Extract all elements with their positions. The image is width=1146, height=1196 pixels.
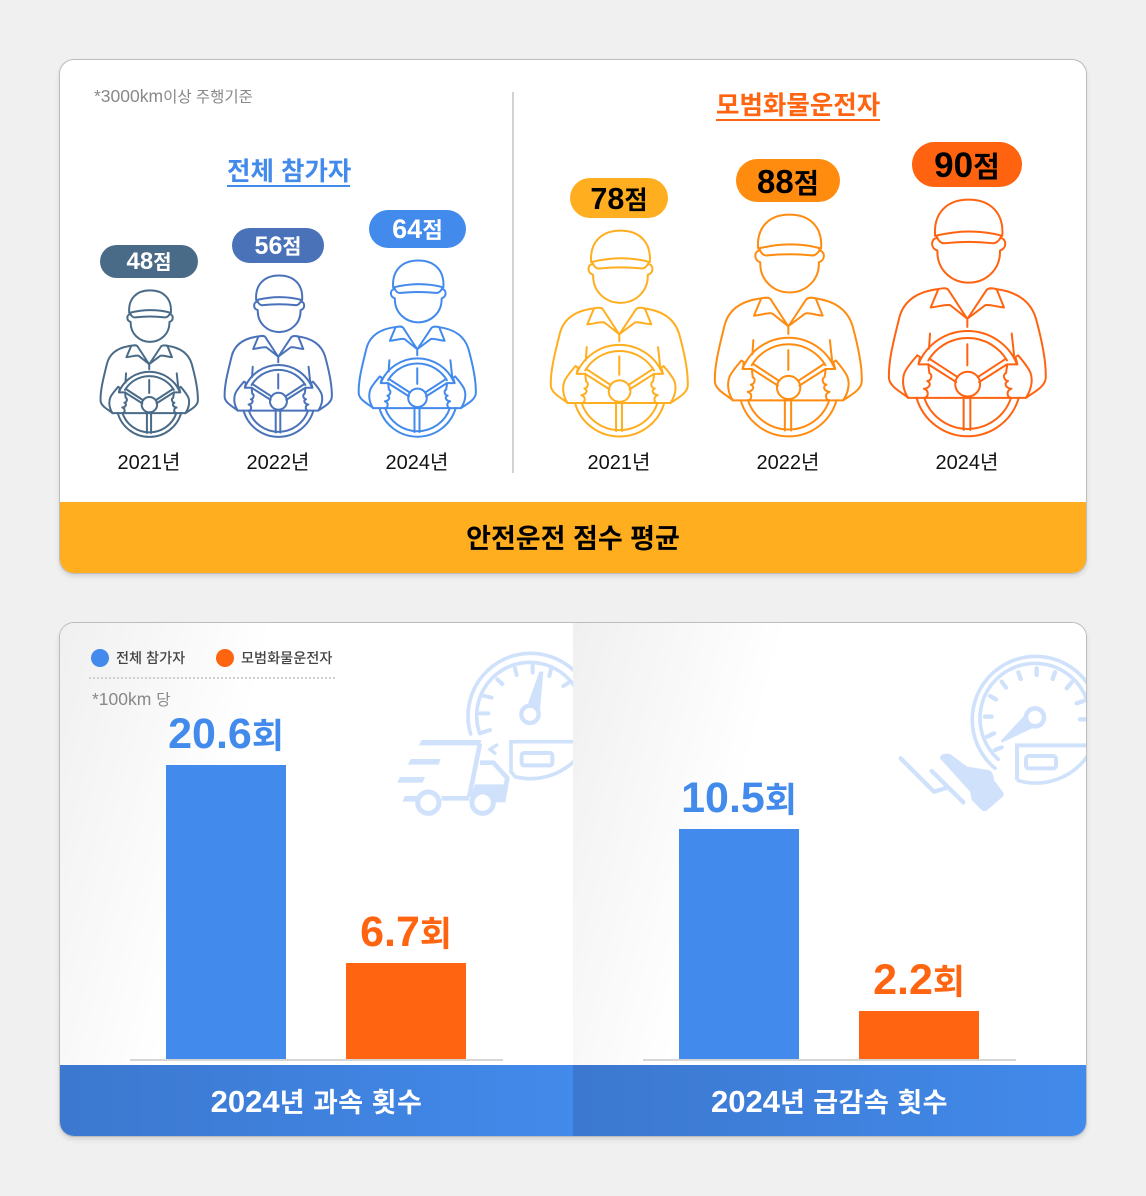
- score pill: 48: 48점: [126, 248, 172, 275]
- bar: acceleration all: [679, 829, 799, 1059]
- note: driving distance basis: *3000km이상 주행기준: [94, 86, 253, 106]
- year label: 2024년: [936, 452, 998, 474]
- score pill: 88: 88점: [757, 163, 819, 200]
- footer bar: speeding: [60, 1065, 573, 1136]
- score pill: 56: 56점: [255, 232, 301, 260]
- icon: driver 2021 all: [100, 289, 199, 438]
- icon: driver 2022 model: [714, 214, 863, 438]
- score pill: 48: [100, 245, 198, 278]
- legend: [89, 648, 335, 679]
- icon: speeding truck and gauge: [398, 652, 573, 816]
- legend dot: all participants: [91, 649, 109, 667]
- icon: driver 2024 all: [358, 260, 477, 438]
- footer title: hard acceleration count: 2024년 급감속 횟수: [711, 1084, 948, 1119]
- footer title: safe driving score: 안전운전 점수 평균: [466, 524, 680, 554]
- score pill: 64: 64점: [392, 214, 443, 244]
- year label: 2022년: [757, 452, 819, 474]
- value: acceleration model 2.2: 2.2회: [873, 956, 965, 1004]
- legend dot: model drivers: [216, 649, 234, 667]
- footer bar: hard acceleration: [573, 1065, 1086, 1136]
- score pill: 78: 78점: [590, 182, 648, 216]
- panel: safe driving score: [60, 60, 1086, 573]
- legend label: model drivers: 모범화물운전자: [241, 651, 332, 667]
- icon: driver 2022 all: [224, 274, 333, 438]
- panel background: speeding: [60, 623, 573, 1065]
- score pill: 88: [736, 159, 840, 202]
- heading: model freight drivers: 모범화물운전자: [716, 92, 880, 120]
- bar: speeding model: [346, 963, 466, 1059]
- year label: 2024년: [386, 452, 448, 474]
- icon: driver 2024 model: [888, 198, 1047, 438]
- score pill: 78: [570, 178, 668, 218]
- year label: 2022년: [247, 452, 309, 474]
- divider between groups: [512, 92, 514, 473]
- value: acceleration all 10.5: 10.5회: [681, 774, 797, 822]
- axis line: speeding: [130, 1059, 503, 1061]
- bar: speeding all: [166, 765, 286, 1059]
- legend label: all participants: 전체 참가자: [116, 651, 185, 667]
- panel: 2024 driving counts: [60, 623, 1086, 1136]
- panel background: hard acceleration: [573, 623, 1086, 1065]
- footer title: speeding count: 2024년 과속 횟수: [211, 1084, 422, 1119]
- score pill: 90: [912, 142, 1022, 187]
- value: speeding model 6.7: 6.7회: [360, 908, 452, 956]
- footer bar: safe driving score: [60, 502, 1086, 573]
- year label: 2021년: [118, 452, 180, 474]
- axis line: acceleration: [643, 1059, 1016, 1061]
- icon: pedal and gauge: [898, 654, 1086, 812]
- heading: all participants: 전체 참가자: [227, 158, 351, 186]
- score pill: 90: 90점: [934, 146, 1000, 185]
- value: speeding all 20.6: 20.6회: [168, 710, 284, 758]
- score pill: 56: [232, 228, 324, 263]
- score pill: 64: [369, 210, 466, 248]
- bar: acceleration model: [859, 1011, 979, 1059]
- icon: driver 2021 model: [550, 230, 689, 438]
- year label: 2021년: [588, 452, 650, 474]
- note: per 100km: *100km 당: [92, 689, 170, 709]
